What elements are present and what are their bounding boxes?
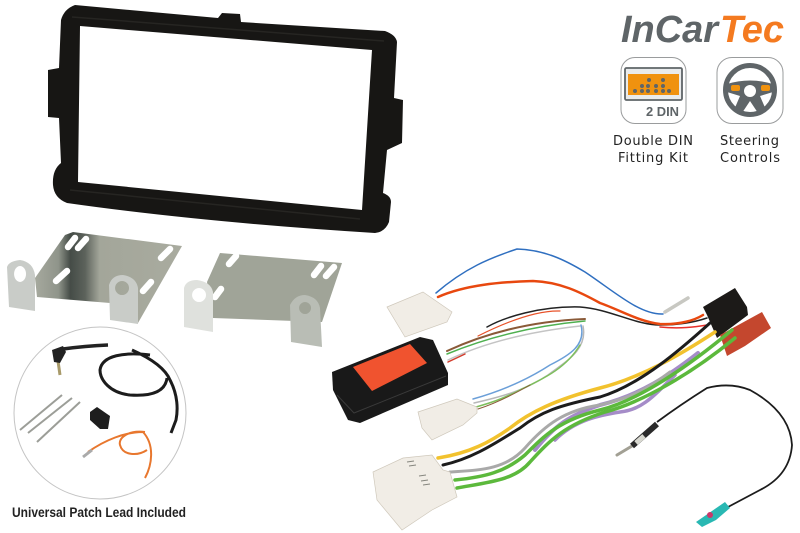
upper wires: [436, 249, 707, 336]
audio jack and cable: [52, 345, 108, 375]
logo: [621, 9, 784, 51]
icon: 2 DIN: [621, 58, 686, 124]
icon caption: steering controls: [720, 134, 780, 166]
terminal pin: [665, 298, 688, 312]
orange lead: [88, 432, 151, 478]
icon caption: steering controls: Controls: [720, 151, 780, 166]
orange label: [353, 344, 427, 391]
antenna lead: [617, 385, 792, 527]
loom wires from module: [447, 319, 585, 409]
red plug: [720, 312, 771, 356]
teal plug: [696, 502, 730, 527]
patch lead circle: [14, 327, 186, 499]
fascia frame: [48, 5, 403, 233]
logo: InCar: [621, 9, 720, 51]
logo: Tec: [720, 9, 784, 51]
left mounting bracket: [7, 232, 182, 324]
icon: steering wheel: [717, 58, 783, 124]
icon: 2 DIN: 2 DIN: [646, 104, 679, 119]
silver wires: [20, 395, 80, 442]
icon caption: steering controls: Steering: [720, 134, 779, 149]
black coiled lead: [100, 350, 177, 433]
control module: [332, 337, 448, 423]
patch lead caption: Universal Patch Lead Included: [12, 505, 186, 520]
white connector middle: [418, 399, 477, 440]
black plug: [703, 288, 748, 338]
icon caption: double din: Double DIN: [613, 134, 693, 149]
white connector top: [387, 292, 452, 337]
right mounting bracket: [184, 253, 342, 347]
white wiring connector: [373, 455, 457, 530]
fuse holder: [90, 407, 110, 429]
icon caption: double din: Fitting Kit: [618, 151, 688, 166]
icon caption: double din: [613, 134, 693, 166]
main wiring loom: [438, 323, 735, 488]
